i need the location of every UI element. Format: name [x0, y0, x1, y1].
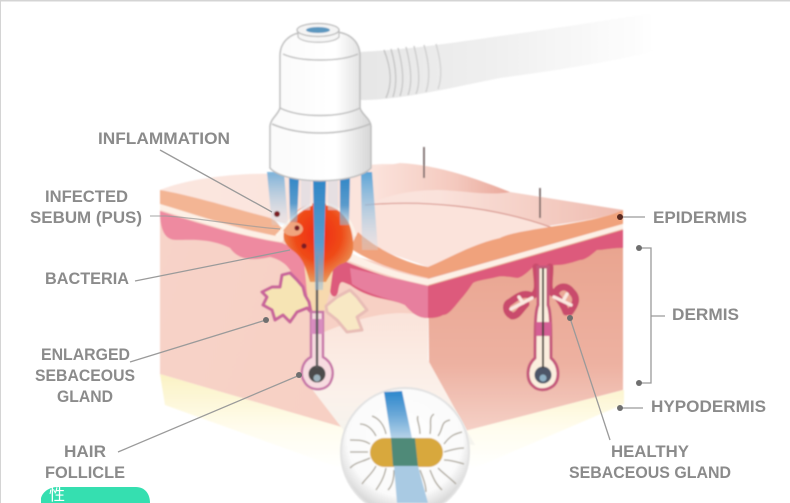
inset: bacterium under light: [341, 388, 469, 503]
label: hair follicle: FOLLICLE: [45, 463, 125, 482]
label: healthy sebaceous gland: [569, 442, 731, 482]
cilia: [350, 414, 464, 492]
dermis left face: [160, 200, 428, 440]
label: hypodermis: HYPODERMIS: [651, 397, 766, 416]
label: healthy sebaceous gland: SEBACEOUS GLAND: [569, 463, 731, 482]
label: enlarged sebaceous gland: [35, 345, 135, 406]
inflamed dome: [283, 203, 353, 282]
label: infected sebum: SEBUM (PUS): [30, 208, 142, 227]
papillary band left: [160, 211, 308, 296]
label: hair follicle: HAIR: [64, 442, 106, 461]
light beams: [267, 172, 378, 290]
hair bulb left: [308, 366, 326, 382]
white layer left: [160, 204, 290, 242]
label: healthy sebaceous gland: HEALTHY: [611, 442, 690, 461]
hose: [360, 12, 660, 100]
papillary band right: [330, 230, 623, 318]
device head: [270, 32, 371, 181]
label: inflammation: INFLAMMATION: [98, 129, 230, 148]
white layer right: [342, 224, 623, 285]
light cone: [305, 313, 475, 445]
label: bacteria: BACTERIA: [45, 269, 129, 288]
follicle sheath left: [302, 312, 333, 389]
leader lines and markers: [118, 150, 665, 452]
epidermis band right: [350, 210, 623, 278]
hair shaft: [316, 255, 318, 368]
enlarged gland left: [262, 273, 311, 322]
label: infected sebum: [30, 187, 142, 227]
green pill badge: [41, 486, 150, 503]
label: hair follicle: [45, 442, 125, 482]
front fold: [365, 203, 553, 267]
label: enlarged sebaceous gland: ENLARGED: [41, 345, 130, 364]
hypodermis layer: [160, 374, 624, 470]
leader dots: [263, 214, 642, 411]
label: epidermis: EPIDERMIS: [653, 208, 747, 227]
label: infected sebum: INFECTED: [45, 187, 128, 206]
bacteria dots: [274, 211, 307, 249]
epidermis band left: [160, 190, 284, 236]
bacterium body: [370, 438, 443, 467]
label: enlarged sebaceous gland: SEBACEOUS: [35, 366, 135, 385]
light beam in inset: [384, 391, 412, 438]
hair strands on surface: [424, 147, 540, 218]
dermis right face: [428, 224, 623, 440]
follicle funnel: [304, 262, 334, 312]
enlarged gland right: [326, 290, 367, 332]
illustration: skin block: [160, 12, 660, 470]
label: enlarged sebaceous gland: GLAND: [57, 387, 113, 406]
healthy follicle right: [506, 267, 576, 390]
infected sebum: [283, 222, 303, 236]
label: dermis: DERMIS: [672, 305, 739, 324]
hair bulb right: [534, 366, 552, 384]
device cap: [298, 30, 339, 42]
back fold: [372, 163, 510, 203]
top surface of skin: [160, 164, 623, 267]
